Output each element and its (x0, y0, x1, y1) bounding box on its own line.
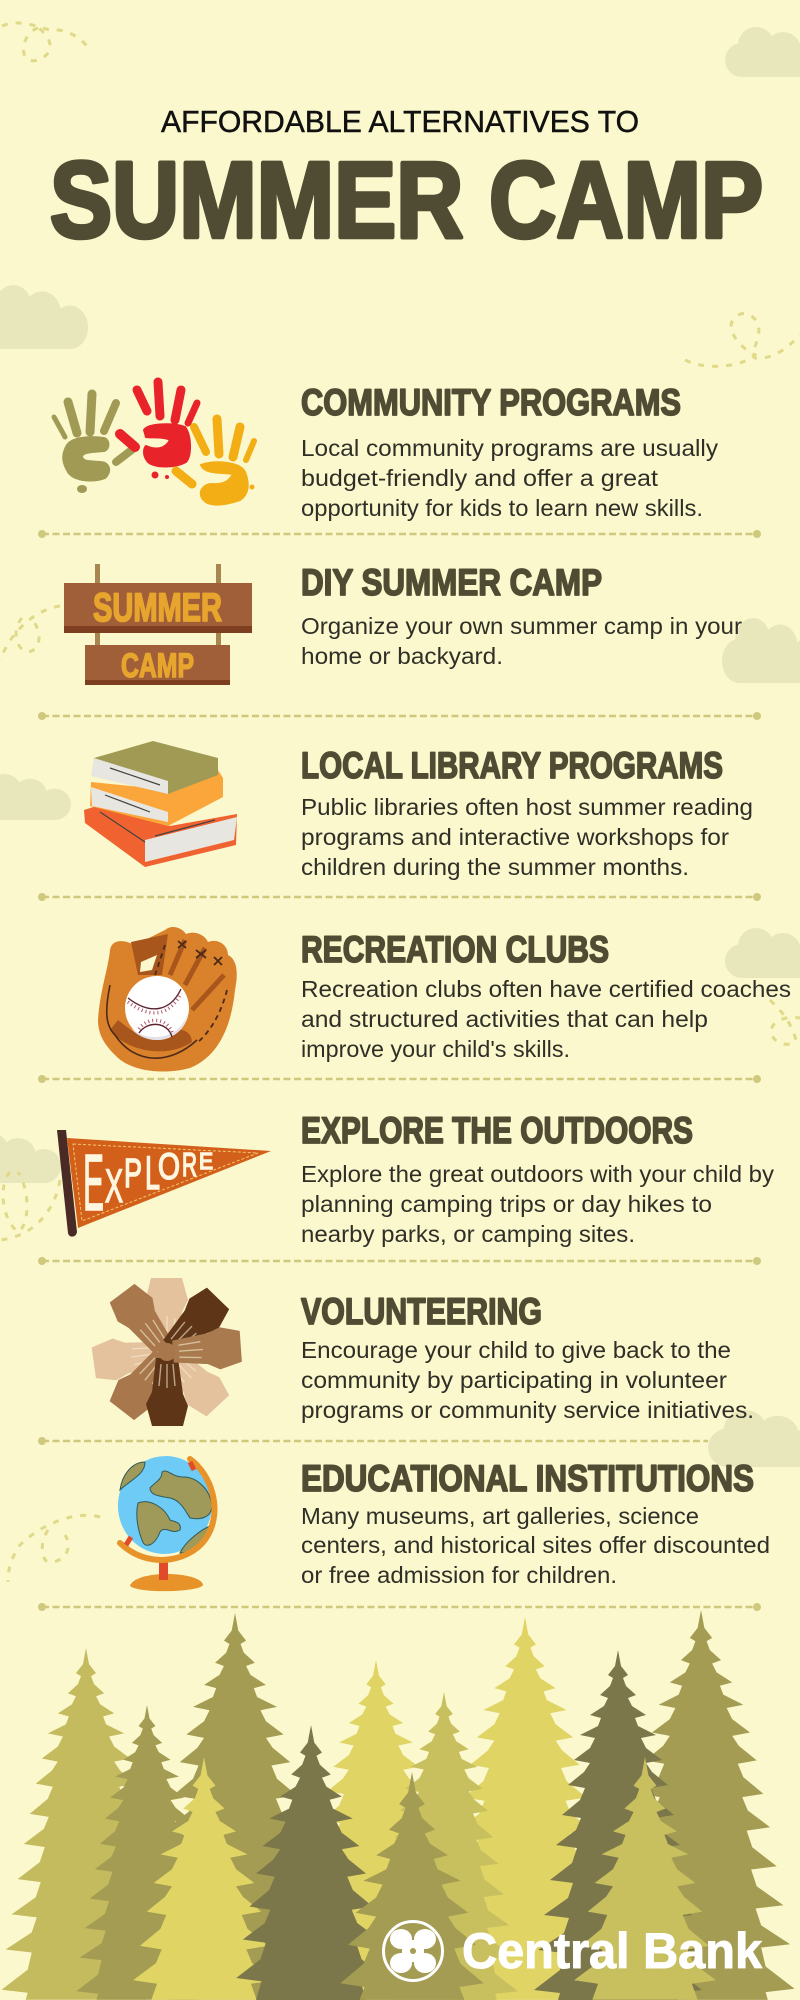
logo mark (384, 1922, 442, 1980)
heading: DIY SUMMER CAMP (301, 562, 602, 603)
body text: Recreation clubs often have certified coaches (301, 976, 791, 1002)
body text (301, 794, 753, 880)
icon: stack of books (84, 741, 237, 867)
body text (301, 1337, 754, 1423)
decorative clouds (0, 27, 800, 1467)
forest of fir trees (2, 1610, 795, 2000)
icon: circle of hands (91, 1278, 242, 1426)
decorative dashed loops (0, 23, 800, 1582)
body text: Organize your own summer camp in your (301, 613, 742, 639)
icon: wooden sign: SUMMER (93, 586, 222, 630)
body text: community by participating in volunteer (301, 1367, 727, 1393)
body text: budget-friendly and offer a great (301, 465, 659, 491)
icon: explore pennant: L (145, 1146, 160, 1199)
panel: local library programs (84, 741, 753, 880)
icon: explore pennant: P (124, 1150, 142, 1196)
panel: recreation clubs (98, 927, 791, 1072)
body text: Many museums, art galleries, science (301, 1503, 699, 1529)
body text: improve your child's skills. (301, 1036, 570, 1062)
body text: planning camping trips or day hikes to (301, 1191, 712, 1217)
icon: explore pennant: E (199, 1148, 213, 1174)
icon: explore pennant: R (182, 1146, 197, 1183)
icon: globe (110, 1449, 220, 1591)
icon: explore pennant: O (158, 1146, 180, 1187)
body text: or free admission for children. (301, 1562, 617, 1588)
logo wordmark: Central Bank (462, 1923, 762, 1979)
panel: volunteering (91, 1278, 754, 1426)
body text (301, 435, 719, 521)
panel: community programs (54, 382, 719, 521)
body text: and structured activities that can help (301, 1006, 708, 1032)
heading: VOLUNTEERING (301, 1291, 542, 1332)
body text: Local community programs are usually (301, 435, 719, 461)
icon: baseball glove (98, 927, 237, 1072)
heading: EXPLORE THE OUTDOORS (301, 1110, 693, 1151)
body text: programs or community service initiatives. (301, 1397, 754, 1423)
icon: explore pennant: X (105, 1159, 123, 1212)
panel: DIY summer camp (64, 562, 742, 685)
body text (301, 1503, 770, 1588)
body text (301, 976, 791, 1062)
title (50, 104, 763, 260)
icon: wooden sign (64, 564, 252, 685)
title kicker: AFFORDABLE ALTERNATIVES TO (161, 104, 639, 139)
panel: explore the outdoors (57, 1110, 775, 1247)
body text: Encourage your child to give back to the (301, 1337, 731, 1363)
panel: educational institutions (110, 1449, 770, 1591)
body text: centers, and historical sites offer discounted (301, 1532, 770, 1558)
icon: explore pennant (57, 1130, 271, 1237)
icon: explore pennant: E (83, 1138, 104, 1227)
body text: children during the summer months. (301, 854, 689, 880)
body text: nearby parks, or camping sites. (301, 1221, 635, 1247)
icon: painted hands (54, 382, 254, 505)
body text: Public libraries often host summer reading (301, 794, 753, 820)
heading: COMMUNITY PROGRAMS (301, 382, 681, 423)
body text: Explore the great outdoors with your child by (301, 1161, 775, 1187)
icon: wooden sign: CAMP (121, 647, 194, 685)
heading: RECREATION CLUBS (301, 929, 609, 970)
body text: home or backyard. (301, 643, 503, 669)
body text: programs and interactive workshops for (301, 824, 729, 850)
body text (301, 1161, 775, 1247)
logo: Central Bank (384, 1922, 762, 1980)
body text (301, 613, 742, 669)
body text: opportunity for kids to learn new skills. (301, 495, 703, 521)
